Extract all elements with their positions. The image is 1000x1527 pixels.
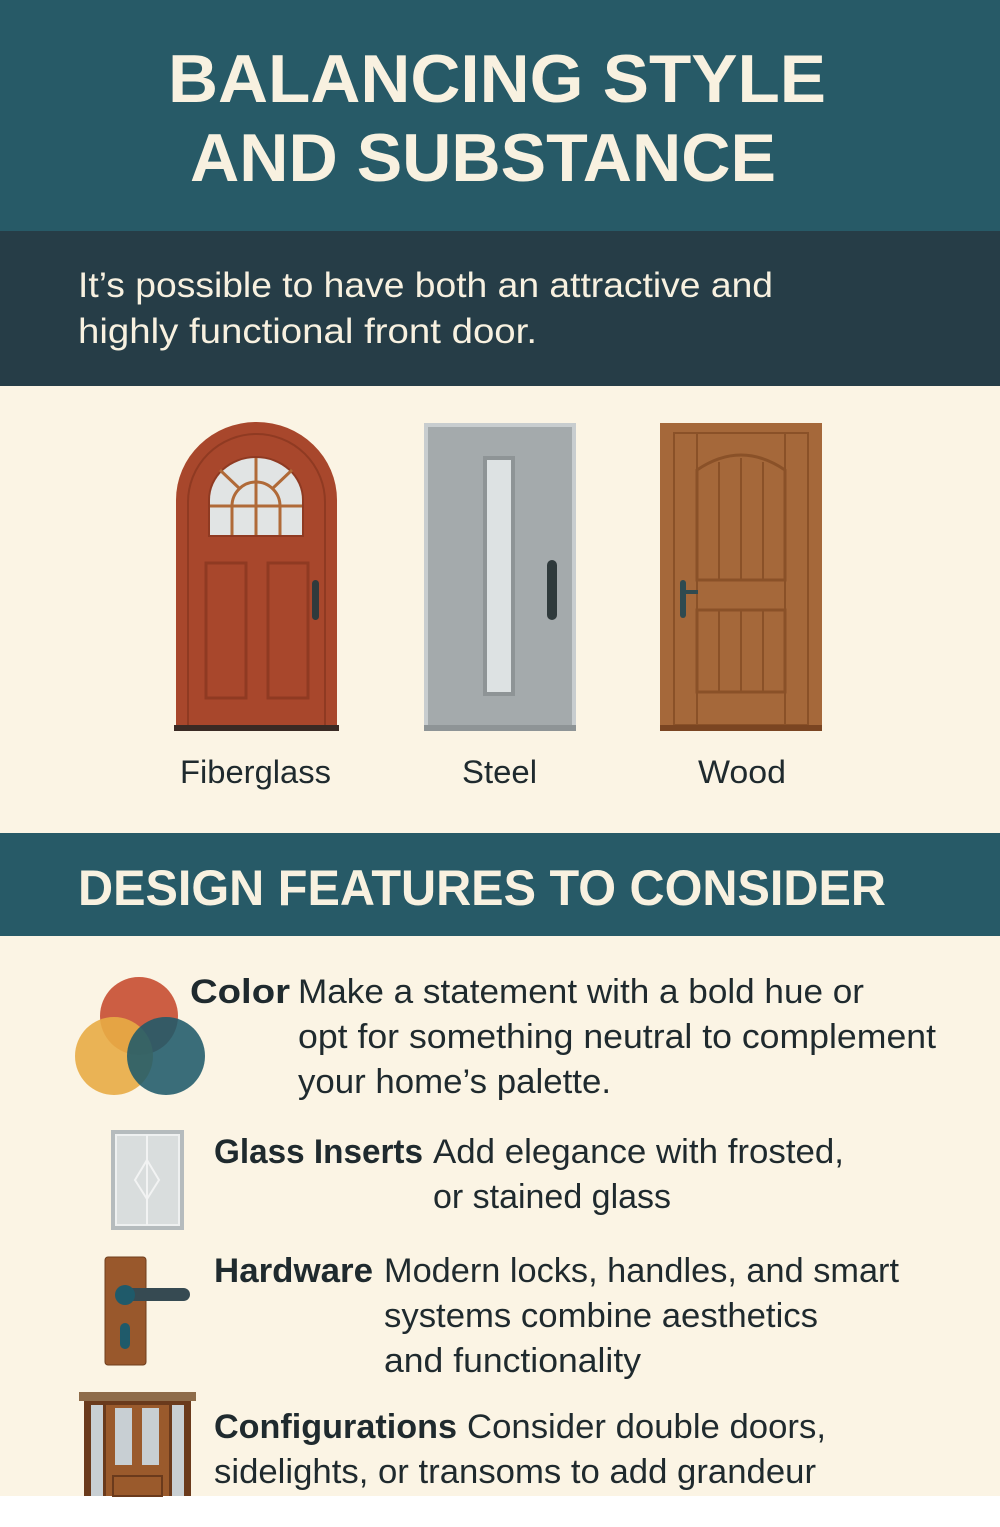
subtitle text: highly functional front door. [78, 312, 537, 351]
feature: color: Make a statement with a bold hue or [298, 973, 864, 1011]
icon: color circles [75, 977, 205, 1095]
door labels: Wood [698, 754, 786, 790]
feature: color: your home’s palette. [298, 1063, 611, 1101]
icon: hardware handle [105, 1257, 190, 1365]
feature: color [190, 973, 937, 1101]
feature: hardware: Hardware [214, 1252, 373, 1290]
feature: glass inserts: Glass Inserts [214, 1133, 423, 1171]
door labels [180, 754, 786, 790]
subtitle text: It’s possible to have both an attractive and [78, 266, 773, 305]
feature: hardware: Modern locks, handles, and smart [384, 1252, 900, 1290]
icon: door configuration [79, 1392, 196, 1496]
icon: glass insert [111, 1130, 184, 1230]
section heading band: DESIGN FEATURES TO CONSIDER [78, 860, 886, 916]
feature: color: Color [190, 973, 290, 1011]
feature: color: opt for something neutral to complement [298, 1018, 937, 1056]
door: fiberglass [174, 422, 339, 731]
feature: glass inserts: Add elegance with frosted, [433, 1133, 844, 1171]
door: steel [424, 423, 576, 731]
door labels: Steel [462, 754, 537, 790]
feature: hardware: and functionality [384, 1342, 641, 1380]
section heading band [0, 833, 1000, 936]
feature: glass inserts [214, 1133, 844, 1216]
feature: configurations: Configurations [214, 1408, 457, 1446]
title: AND SUBSTANCE [190, 120, 776, 196]
subtitle text [78, 266, 773, 351]
title: BALANCING STYLE [168, 41, 826, 117]
title [168, 41, 826, 196]
door: wood [660, 423, 822, 731]
subtitle band [0, 231, 1000, 386]
feature: hardware [214, 1252, 900, 1380]
title band [0, 0, 1000, 231]
feature: configurations [214, 1408, 826, 1491]
feature: configurations: Consider double doors, [467, 1408, 826, 1446]
feature: glass inserts: or stained glass [433, 1178, 671, 1216]
feature: hardware: systems combine aesthetics [384, 1297, 818, 1335]
door labels: Fiberglass [180, 754, 331, 790]
feature: configurations: sidelights, or transoms to add grandeur [214, 1453, 816, 1491]
